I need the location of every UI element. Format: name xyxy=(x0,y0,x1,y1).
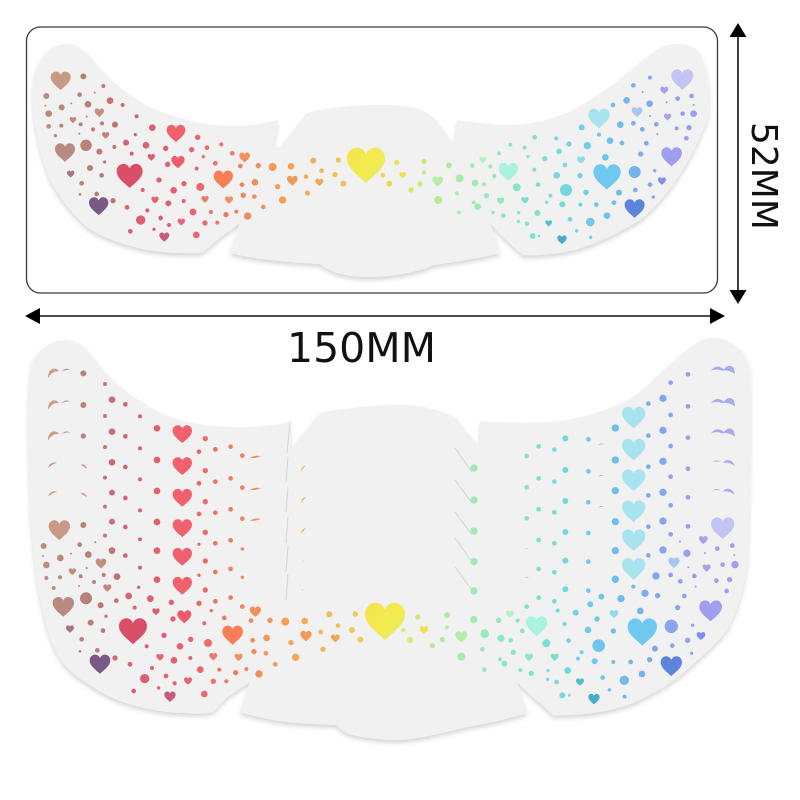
top sticker right dots xyxy=(408,76,697,239)
top sticker left dots xyxy=(43,73,399,238)
top sticker centre yellow heart xyxy=(347,148,385,183)
bottom sticker left dots xyxy=(41,541,363,697)
height dimension arrow: 52MM xyxy=(730,23,746,304)
bottom sticker right repeated columns xyxy=(470,372,690,609)
top sticker backing shape xyxy=(33,44,709,277)
bottom sticker right dots xyxy=(401,541,739,699)
width dimension arrow: 150MM xyxy=(25,308,725,324)
bottom sticker centre yellow heart xyxy=(365,603,405,640)
bottom sticker right hearts xyxy=(420,407,734,704)
top sticker right hearts xyxy=(399,69,693,244)
size frame box xyxy=(26,27,718,293)
stacked sheet slits xyxy=(286,422,472,600)
bottom sticker: stacked sheet of heart stickers xyxy=(29,338,750,740)
bottom sticker left hearts xyxy=(49,425,340,702)
bottom sticker backing shape xyxy=(29,338,750,740)
width label: 150MM xyxy=(287,324,436,372)
top sticker left hearts xyxy=(51,72,323,242)
bottom sticker right heart crescents xyxy=(711,366,735,495)
top sticker: single heart sticker xyxy=(33,44,709,277)
bottom sticker left repeated columns and crescents xyxy=(80,370,306,609)
bottom sticker left heart crescents xyxy=(48,369,87,498)
height label: 52MM xyxy=(743,122,784,230)
